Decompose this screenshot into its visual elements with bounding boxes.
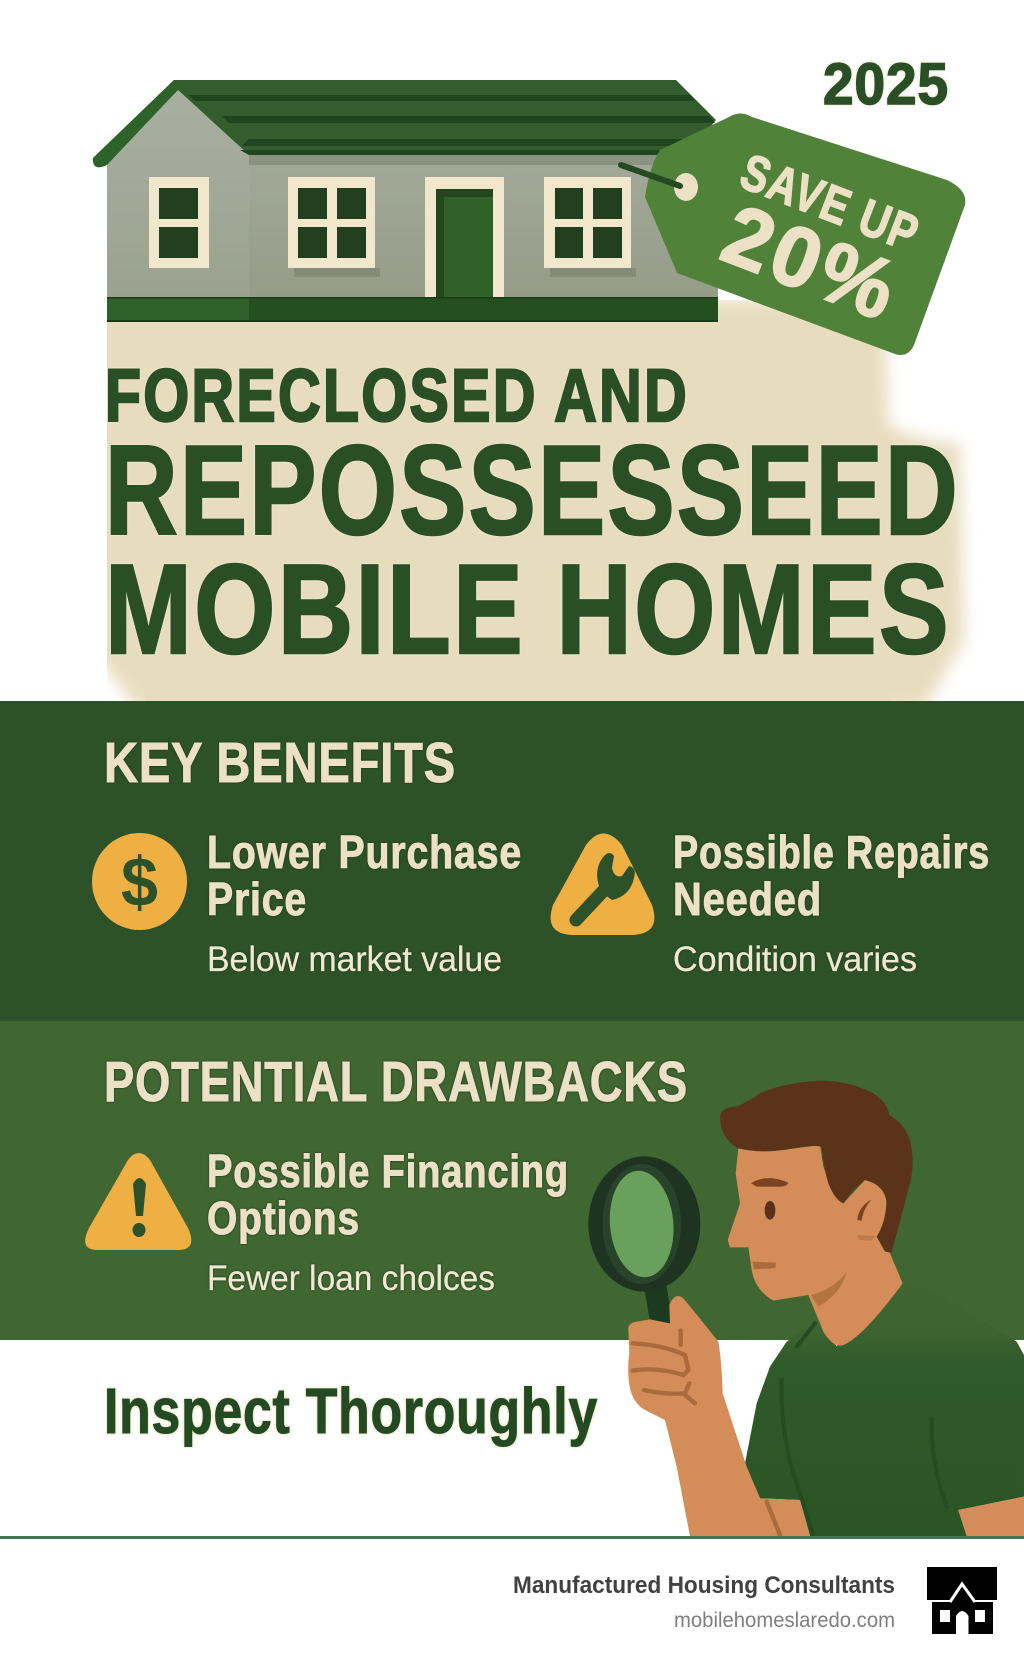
illustration: house	[93, 80, 718, 322]
eyebrow	[751, 1178, 788, 1187]
inner rim	[602, 1164, 681, 1284]
neck mark	[857, 1235, 875, 1241]
window middle	[288, 177, 380, 277]
foundation	[107, 297, 718, 322]
title line 1: FORECLOSED AND	[105, 354, 689, 437]
eye	[765, 1201, 775, 1220]
footer rule	[0, 1536, 1024, 1539]
lens	[605, 1168, 678, 1280]
illustration: man with magnifying glass	[588, 1081, 1024, 1536]
benefit: lower purchase price: Below market value	[207, 940, 502, 979]
icon: wrench	[551, 834, 654, 935]
item: possible financing options	[207, 1145, 569, 1298]
item: possible repairs needed: Condition varies	[673, 940, 917, 979]
icon: dollar coin: $	[121, 843, 158, 921]
right forearm	[958, 1497, 1024, 1536]
item: possible repairs needed: Needed	[673, 873, 822, 925]
magnifying glass	[588, 1156, 700, 1325]
finger lines	[633, 1331, 780, 1535]
tag text: save up: SAVE UP	[733, 143, 927, 263]
website: mobilehomeslaredo.com	[674, 1609, 895, 1632]
tag body	[645, 114, 965, 355]
icon: company logo	[927, 1567, 997, 1634]
rim	[588, 1156, 700, 1292]
hair	[720, 1081, 913, 1253]
price tag	[621, 114, 965, 355]
tag text: 20%: 20%	[710, 187, 912, 340]
year label: 2025	[823, 52, 949, 117]
shirt	[745, 1283, 1024, 1536]
benefits background	[0, 701, 1024, 1021]
icon: dollar coin	[92, 833, 187, 930]
item: possible financing options: Possible Financing	[207, 1145, 569, 1197]
shirt folds	[781, 1323, 947, 1535]
benefit: lower purchase price	[207, 826, 522, 979]
callout: inspect thoroughly: Inspect Thoroughly	[104, 1375, 598, 1447]
main title	[105, 354, 960, 680]
ear detail	[857, 1199, 872, 1221]
company name: Manufactured Housing Consultants	[513, 1572, 895, 1599]
house roof	[93, 80, 716, 167]
forearm and hand	[628, 1296, 810, 1536]
window left	[149, 177, 209, 268]
item: possible financing options: Options	[207, 1192, 360, 1244]
panel: potential drawbacks	[0, 1021, 1024, 1340]
jaw shadow	[811, 1272, 847, 1307]
panel: key benefits	[0, 701, 1024, 1021]
mouth	[753, 1262, 776, 1269]
window right	[544, 177, 636, 277]
drawbacks heading: POTENTIAL DRAWBACKS	[104, 1050, 688, 1114]
icon: warning triangle	[85, 1153, 191, 1250]
handle	[644, 1287, 673, 1325]
benefit: lower purchase price: Price	[207, 873, 307, 925]
neck and face	[728, 1145, 903, 1346]
drawbacks background	[0, 1021, 1024, 1340]
door	[425, 177, 504, 297]
tag hole	[674, 173, 698, 201]
house walls	[107, 90, 718, 297]
benefit: lower purchase price: Lower Purchase	[207, 826, 522, 878]
panel: cream title backdrop	[90, 300, 964, 708]
benefits heading: KEY BENEFITS	[104, 731, 456, 795]
tag string	[621, 165, 680, 186]
footer branding	[513, 1567, 997, 1634]
item: possible financing options: Fewer loan cholces	[207, 1259, 495, 1298]
item: possible repairs needed	[673, 826, 990, 979]
